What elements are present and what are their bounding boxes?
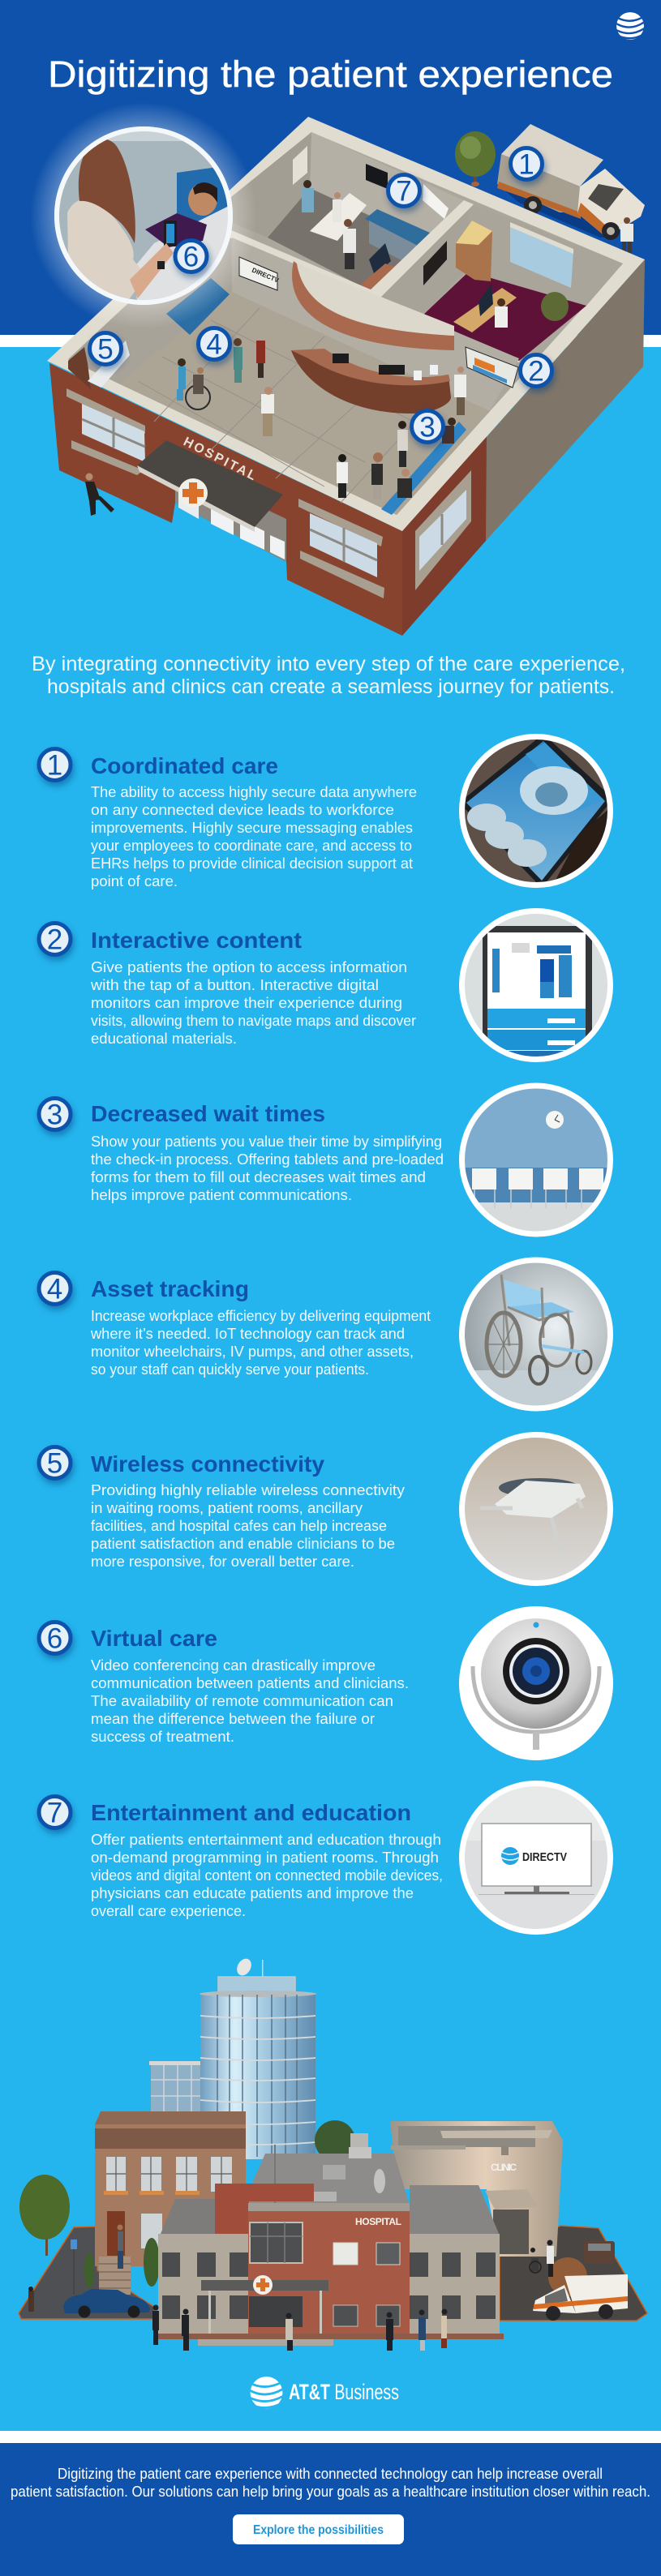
badge 5 on map [89, 332, 122, 365]
digital display board [466, 347, 518, 388]
awning [137, 440, 283, 527]
body text 1: on any connected device leads to workforce [91, 801, 394, 818]
title: Digitizing the patient experience [48, 54, 613, 95]
roof equipment [274, 2145, 385, 2203]
clinic building [390, 2121, 563, 2257]
front windows right [298, 499, 384, 598]
body text 4: Increase workplace efficiency by delivering equipment [91, 1307, 431, 1324]
number badge 5: 5 [47, 1448, 62, 1479]
street people [28, 2225, 554, 2351]
body text 4 [90, 1307, 431, 1378]
number badge 5 [39, 1447, 71, 1479]
number badge 2: 2 [47, 924, 62, 955]
intro text: By integrating connectivity into every step of the care experience, [32, 653, 625, 675]
glass tower [200, 1956, 316, 2159]
body text 7: overall care experience. [91, 1902, 246, 1919]
lobby floor [118, 292, 490, 515]
city illustration [19, 1956, 647, 2351]
entrance canopy [201, 2275, 328, 2343]
roof rim [47, 117, 645, 531]
number badge 2 [39, 923, 71, 955]
building: right brick wall [402, 435, 487, 636]
glow behind circle 6 [30, 102, 257, 329]
hospital roof [249, 2154, 410, 2205]
heading 3: Decreased wait times [91, 1101, 325, 1126]
body text 7: Offer patients entertainment and education through [91, 1831, 441, 1848]
DIRECTV lobby sign [239, 257, 281, 290]
interior base [68, 132, 623, 515]
body text 6: mean the difference between the failure or [91, 1710, 375, 1727]
ambulance illustration [497, 124, 645, 255]
tree by the ambulance [455, 131, 496, 186]
reception desk [291, 349, 451, 414]
right wing [410, 2185, 500, 2335]
number badge 3: 3 [47, 1099, 62, 1130]
number badge 4: 4 [47, 1273, 62, 1305]
hospital wall sign: HOSPITAL [181, 435, 258, 483]
badge 2 on map [521, 355, 552, 388]
body text 5: patient satisfaction and enable clinicians to be [91, 1535, 395, 1552]
number badge 4 [39, 1273, 71, 1305]
image: waiting room chairs [462, 1082, 612, 1239]
front windows left [67, 388, 145, 475]
body text 1 [91, 783, 417, 889]
body text 2: monitors can improve their experience during [91, 994, 402, 1011]
item 5: wireless connectivity [39, 1435, 612, 1585]
body text 2: educational materials. [91, 1030, 237, 1047]
item 1: coordinated care [39, 734, 616, 889]
body text 2: with the tap of a button. Interactive digital [90, 976, 379, 993]
building cutaway illustration [47, 117, 645, 636]
heading 6: Virtual care [91, 1626, 217, 1651]
badge 6 on map: 6 [183, 242, 199, 272]
lobby people [177, 338, 466, 499]
DIRECTV lobby sign: DIRECTV [251, 267, 281, 285]
right wall window [415, 470, 471, 590]
plinth [154, 2334, 504, 2346]
footer text [11, 2465, 650, 2500]
badge 7 on map [388, 175, 420, 208]
image: ceiling access point [462, 1435, 612, 1585]
body text 7: physicians can educate patients and improve the [91, 1884, 414, 1901]
entrance storefront [175, 466, 286, 562]
badge 3 on map: 3 [419, 412, 436, 443]
partition rim office [368, 200, 474, 298]
glass annex building [149, 2061, 208, 2114]
badge 7 on map: 7 [396, 175, 412, 208]
body text 7 [91, 1831, 443, 1919]
body text 5: more responsive, for overall better care. [91, 1553, 354, 1570]
right street [500, 2226, 647, 2321]
badge 1 on map [511, 148, 542, 180]
body text 1: EHRs helps to provide clinical decision support at [91, 855, 413, 872]
circle 6 virtual care scene [54, 126, 233, 305]
icon: medical cross sign [178, 478, 208, 508]
badge 6 on map [175, 240, 207, 272]
body text 2: Give patients the option to access information [91, 958, 407, 975]
body text 3: forms for them to fill out decreases wait times and [91, 1168, 426, 1185]
reception feature wall [292, 261, 454, 350]
intro text: hospitals and clinics can create a seamless journey for patients. [47, 675, 615, 698]
intro text [32, 653, 625, 698]
footer panel [0, 2443, 661, 2576]
left tree [19, 2175, 70, 2256]
brownstone building [84, 2111, 246, 2295]
body text 2 [90, 958, 416, 1047]
body text 1: your employees to coordinate care, and access to [91, 837, 412, 854]
hospital central brick facade: HOSPITAL [355, 2216, 401, 2227]
hospital central brick facade [248, 2203, 410, 2339]
lobby left wall [68, 212, 232, 384]
number badge 6: 6 [47, 1623, 62, 1654]
white band above footer [0, 2431, 661, 2443]
body text 4: monitor wheelchairs, IV pumps, and other assets, [91, 1343, 414, 1360]
item 7: entertainment and education [39, 1784, 612, 1934]
badge 3 on map [412, 410, 443, 443]
number badge 7 [39, 1797, 71, 1829]
lobby door [68, 341, 130, 389]
floor tile lines [138, 308, 430, 503]
image: webcam [459, 1606, 613, 1760]
icon: AT&T globe logo top right [616, 12, 644, 40]
image: DIRECTV television [462, 1784, 612, 1934]
badge 4 on map: 4 [206, 329, 222, 360]
blue car [63, 2289, 150, 2317]
body text 7: videos and digital content on connected mobile devices, [91, 1867, 443, 1884]
left street [19, 2227, 154, 2319]
item 2: interactive content [39, 908, 612, 1062]
logo wordmark: AT&T Business [289, 2380, 399, 2404]
item 6: virtual care [39, 1606, 613, 1760]
hospital upper red section [215, 2184, 314, 2234]
body text 3: Show your patients you value their time by simplifying [91, 1133, 442, 1150]
tree behind hospital [315, 2120, 368, 2161]
body text 4: so your staff can quickly serve your patients. [91, 1361, 369, 1378]
body text 6: success of treatment. [91, 1728, 234, 1745]
body text 3 [91, 1133, 444, 1203]
left wing [158, 2199, 249, 2335]
number badge 6 [39, 1622, 71, 1654]
lobby back wall [232, 238, 519, 411]
body text 6: The availability of remote communication can [91, 1692, 393, 1709]
body text 3: the check-in process. Offering tablets and pre-loaded [91, 1151, 444, 1168]
item 3: decreased wait times [39, 1082, 612, 1239]
person walking outside [85, 474, 114, 516]
body text 5: Providing highly reliable wireless connectivity [91, 1481, 406, 1498]
brown jeep [584, 2241, 615, 2264]
body text 1: point of care. [91, 872, 178, 889]
icon: footer globe [250, 2377, 282, 2409]
awning lip [137, 465, 255, 532]
body text 5 [91, 1481, 406, 1570]
reception ceiling disc [297, 264, 454, 336]
body text 6: Video conferencing can drastically improve [91, 1657, 376, 1674]
heading 1: Coordinated care [91, 753, 278, 778]
body text 5: facilities, and hospital cafes can help increase [91, 1517, 387, 1534]
body text 4: where it’s needed. IoT technology can track and [90, 1325, 405, 1342]
heading 2: Interactive content [91, 928, 302, 953]
item 4: asset tracking [39, 1257, 612, 1411]
body text 7: on-demand programming in patient rooms. Through [91, 1849, 439, 1866]
body text 6: communication between patients and clinicians. [91, 1674, 409, 1691]
image: interactive map monitor [462, 908, 612, 1062]
waiting chairs right [381, 422, 466, 515]
image: DIRECTV television: DIRECTV [522, 1850, 567, 1864]
badge 5 on map: 5 [97, 334, 114, 365]
button: explore the possibilities [233, 2514, 404, 2544]
header panel: dark blue [0, 0, 661, 335]
lobby blue chairs [166, 278, 230, 335]
badge 4 on map [198, 328, 230, 360]
partition rim between patient room and lobby [230, 229, 523, 362]
footer text: Digitizing the patient care experience with connected technology can help increase overall [58, 2465, 603, 2482]
heading 4: Asset tracking [91, 1276, 249, 1301]
badge 2 on map: 2 [528, 355, 544, 388]
number badge 1 [39, 749, 71, 782]
body text 6 [91, 1657, 409, 1745]
white band under header [0, 335, 661, 347]
heading 5: Wireless connectivity [91, 1451, 325, 1477]
heading 7: Entertainment and education [91, 1800, 411, 1825]
number badge 3 [39, 1098, 71, 1130]
body text 5: in waiting rooms, patient rooms, ancillary [91, 1499, 363, 1516]
body text 1: The ability to access highly secure data anywhere [91, 783, 417, 800]
body text 2: visits, allowing them to navigate maps and discover [91, 1012, 416, 1029]
street lamp [71, 2240, 77, 2295]
building: right outer wall [486, 259, 645, 541]
body text 3: helps improve patient communications. [91, 1186, 352, 1203]
number badge 7: 7 [47, 1797, 62, 1829]
button: explore the possibilities: Explore the possibilities [253, 2523, 384, 2537]
badge 1 on map: 1 [518, 149, 534, 180]
office room [380, 203, 623, 361]
image: wheelchair [462, 1257, 612, 1411]
patient room [231, 132, 464, 294]
clinic building: CLINIC [491, 2162, 517, 2173]
number badge 1: 1 [47, 749, 62, 782]
building: front brick wall [49, 363, 402, 636]
street ambulance [533, 2257, 628, 2321]
body text 1: improvements. Highly secure messaging enables [91, 819, 413, 836]
AT&T Business logo [248, 2377, 399, 2409]
image: tablet with brain scan [459, 734, 616, 888]
